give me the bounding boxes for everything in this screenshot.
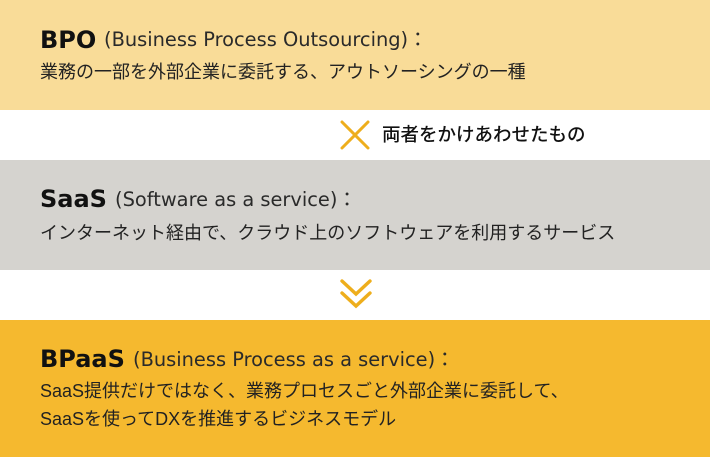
panel: BPaaS (0, 320, 710, 457)
text: combination of both: 両者をかけあわせたもの (382, 124, 586, 145)
panel: BPO (0, 0, 710, 110)
text: SaaS definition: インターネット経由で、クラウド上のソフトウェアを利用するサービス (40, 223, 615, 243)
text: BPaaS definition: SaaSを使ってDXを推進するビジネスモデル (40, 409, 396, 429)
text: BPaaS definition (40, 381, 569, 429)
text: BPO definition: 業務の一部を外部企業に委託する、アウトソーシングの一種 (40, 62, 526, 82)
heading: SaaS: SaaS (40, 185, 107, 213)
subheading: Business Process as a service: (Business Process as a service)： (133, 348, 455, 371)
icon: cross (340, 120, 370, 150)
subheading: Business Process Outsourcing: (Business Process Outsourcing)： (104, 28, 428, 51)
subheading: Software as a service: (Software as a service)： (115, 188, 357, 211)
icon: double chevron arrow (340, 279, 372, 308)
heading: BPaaS: BPaaS (40, 345, 125, 373)
heading: BPO: BPO (40, 26, 96, 54)
panel: SaaS (0, 160, 710, 270)
text: BPaaS definition: SaaS提供だけではなく、業務プロセスごと外部企業に委託して、 (40, 381, 569, 401)
